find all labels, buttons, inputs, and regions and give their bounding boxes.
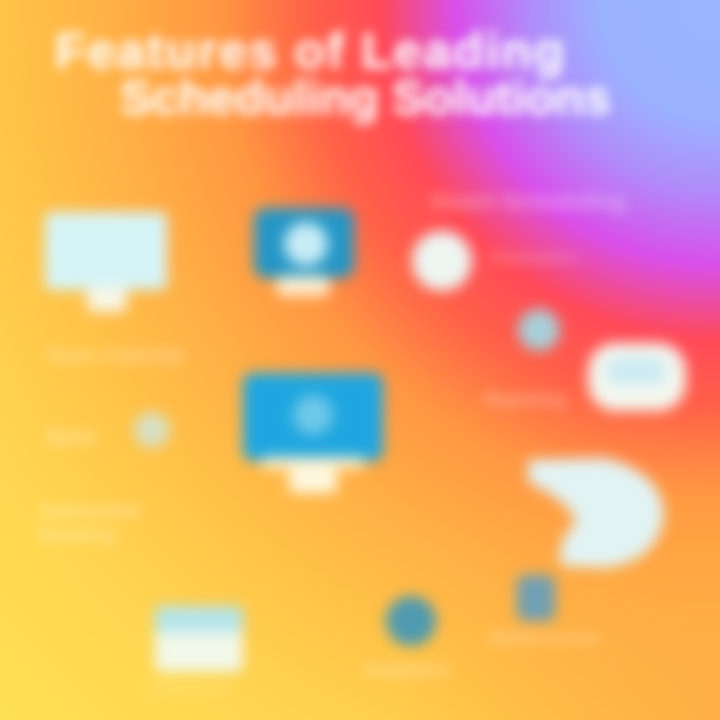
text label: slate tile caption: Mobile Access — [490, 630, 601, 647]
icon: large blue monitor — [231, 361, 395, 504]
text label: mid left caption: Sync — [45, 424, 98, 449]
icon: small pale panel — [155, 606, 243, 672]
icon: pale pie shape — [518, 448, 674, 578]
text label: panel caption: Integrations — [145, 680, 231, 697]
text block: top right heading: Smart Scheduling — [430, 188, 626, 214]
title: Features of Leading — [55, 23, 566, 79]
icon: pale circle — [412, 231, 472, 291]
title — [49, 23, 614, 132]
text label: circle caption: Reminders — [490, 248, 578, 267]
text block: lower left caption: Automated — [40, 501, 139, 522]
icon: pale monitor — [34, 201, 178, 322]
text label: cloud caption: Reporting — [485, 390, 565, 409]
icon: pale cloud box — [588, 343, 686, 411]
icon: blue screen — [242, 196, 366, 306]
text block: lower left caption: Booking — [40, 525, 116, 546]
text label: teal circle caption: Analytics — [365, 660, 449, 681]
icon: small pale circle — [134, 412, 170, 448]
icon: small blue-grey circle — [518, 309, 560, 351]
title: Scheduling Solutions — [120, 72, 611, 125]
text label: left caption: Team Calendar — [45, 345, 187, 367]
icon: small slate tile — [517, 575, 555, 621]
icon: teal circle — [386, 596, 436, 646]
text block: lower left caption — [36, 500, 143, 548]
